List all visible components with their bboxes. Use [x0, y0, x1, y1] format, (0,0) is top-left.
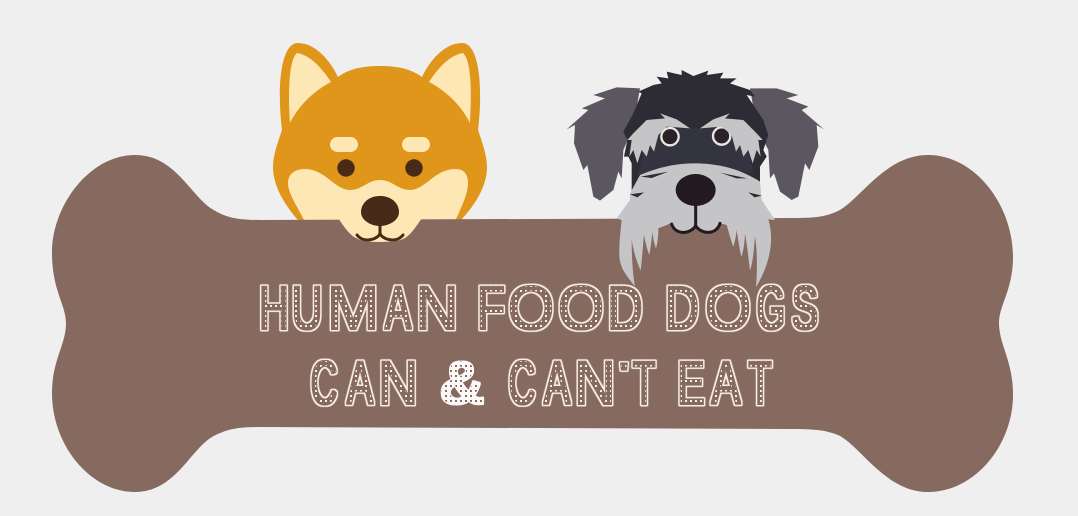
title: Human Food Dogs Can & Can't Eat: U: [292, 274, 322, 342]
shiba mouth: [357, 224, 403, 240]
schnauzer left eye: [661, 128, 679, 145]
schnauzer right brow: [700, 113, 763, 163]
title: Human Food Dogs Can & Can't Eat: A: [711, 349, 740, 417]
title: Human Food Dogs Can & Can't Eat: D: [607, 274, 643, 342]
schnauzer lower right muzzle mark: [748, 192, 762, 197]
shiba dog head: [273, 43, 487, 228]
schnauzer right ear: [750, 88, 824, 200]
title: Human Food Dogs Can & Can't Eat: S: [792, 274, 818, 342]
schnauzer upper left muzzle mark: [641, 172, 668, 178]
schnauzer beard and muzzle: [617, 163, 775, 287]
title: Human Food Dogs Can & Can't Eat: C: [310, 349, 337, 417]
title: Human Food Dogs Can & Can't Eat: O: [507, 274, 554, 342]
shiba left eye: [337, 159, 355, 177]
title: Human Food Dogs Can & Can't Eat: T: [633, 349, 655, 417]
title: Human Food Dogs Can & Can't Eat: N: [574, 349, 616, 417]
shiba left brow: [330, 137, 358, 152]
title: Human Food Dogs Can & Can't Eat: F: [477, 274, 505, 342]
schnauzer dog head: [567, 70, 824, 287]
bone shape: [52, 155, 1013, 492]
shiba left inner ear: [289, 53, 331, 123]
shiba right brow: [402, 137, 430, 152]
schnauzer left brow: [627, 113, 690, 163]
title: Human Food Dogs Can & Can't Eat: O: [557, 274, 604, 342]
shiba right inner ear: [429, 53, 471, 123]
schnauzer eye band: [637, 128, 754, 175]
title: Human Food Dogs Can & Can't Eat: C: [508, 349, 535, 417]
shiba head and ears: [273, 43, 487, 228]
schnauzer left ear: [567, 87, 640, 201]
title: Human Food Dogs Can & Can't Eat: ': [618, 358, 630, 389]
title: Human Food Dogs Can & Can't Eat: E: [677, 349, 705, 417]
schnauzer upper right muzzle mark: [720, 173, 747, 178]
title: Human Food Dogs Can & Can't Eat: M: [327, 274, 379, 342]
shiba nose: [361, 196, 399, 226]
title: Human Food Dogs Can & Can't Eat: G: [757, 274, 785, 342]
title: Human Food Dogs Can & Can't Eat: H: [259, 274, 288, 342]
shiba cheeks: [288, 169, 468, 228]
schnauzer dark fur: [623, 70, 768, 192]
title: Human Food Dogs Can & Can't Eat: A: [544, 349, 570, 417]
title: Human Food Dogs Can & Can't Eat: &: [438, 349, 485, 417]
title: Human Food Dogs Can & Can't Eat: O: [704, 274, 751, 342]
title: Human Food Dogs Can & Can't Eat: N: [415, 274, 458, 342]
schnauzer mouth: [672, 203, 720, 232]
shiba muzzle over bone: [338, 196, 422, 242]
title: Human Food Dogs Can & Can't Eat: N: [377, 349, 418, 417]
shiba right eye: [405, 159, 423, 177]
schnauzer right eye: [713, 127, 730, 145]
shiba chin: [338, 218, 422, 242]
title: Human Food Dogs Can & Can't Eat: D: [665, 274, 698, 342]
schnauzer lower left muzzle mark: [630, 192, 644, 197]
title: Human Food Dogs Can & Can't Eat: T: [748, 349, 771, 417]
title: Human Food Dogs Can & Can't Eat: A: [385, 274, 411, 342]
schnauzer nose: [676, 174, 716, 206]
title: Human Food Dogs Can & Can't Eat: A: [347, 349, 373, 417]
